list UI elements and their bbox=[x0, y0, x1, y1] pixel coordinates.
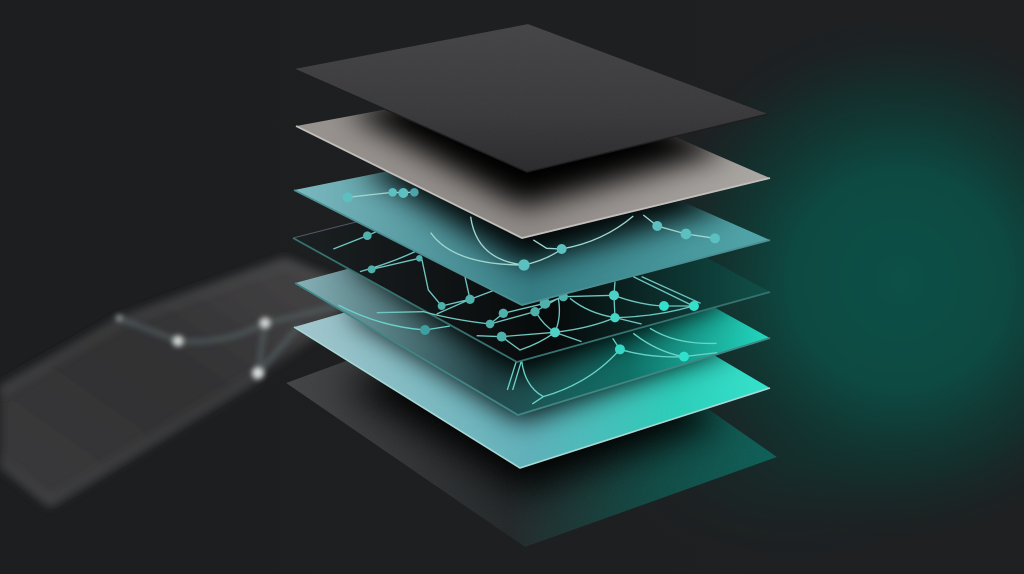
layer 5: teal glass plate bbox=[294, 269, 770, 416]
layer 3: teal plate bbox=[294, 172, 770, 306]
layer 4: dark glass plate bbox=[292, 222, 770, 363]
circuit lines on layer 5 bbox=[338, 305, 717, 404]
nodes on layer 3 bbox=[343, 188, 720, 271]
teal glow on the right bbox=[600, 10, 1024, 572]
circuit lines on layer 3 bbox=[343, 188, 720, 271]
circuit lines on layer 4 bbox=[333, 229, 701, 350]
ghost lower edge bbox=[0, 376, 258, 503]
layer 7: bottom dark textured plate bbox=[286, 361, 776, 547]
ghost circuit lines bbox=[119, 305, 340, 373]
ghost plate soft edge bbox=[0, 262, 330, 392]
nodes on layer 5 bbox=[420, 325, 689, 362]
ghost glowing nodes bbox=[116, 314, 270, 379]
blurred ghost plate on the left bbox=[0, 259, 345, 503]
layer 6: bright teal plate bbox=[294, 312, 770, 469]
layer 2: light grey plate bbox=[296, 110, 770, 239]
nodes on layer 4 bbox=[363, 231, 699, 342]
layer 1: top dark textured plate bbox=[290, 20, 770, 175]
